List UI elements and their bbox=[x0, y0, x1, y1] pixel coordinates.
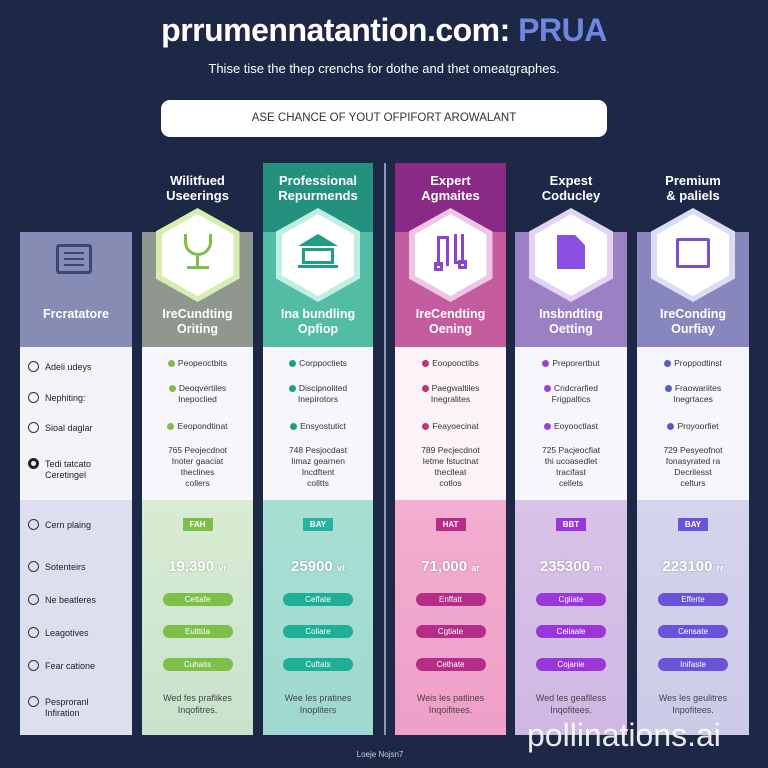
panel: column 3: Ietme Istuctnat bbox=[423, 456, 478, 466]
panel: column 3: theclleat bbox=[435, 467, 466, 477]
panel: feature labels: Sotenteirs bbox=[45, 562, 86, 572]
heading bbox=[665, 173, 721, 203]
heading: Useerings bbox=[166, 188, 229, 203]
panel: column 1: Inepoclied bbox=[178, 394, 217, 404]
icon: trophy hexagon bbox=[156, 208, 240, 302]
panel: column 2: Coliare bbox=[305, 627, 331, 636]
heading: Agmaites bbox=[421, 188, 480, 203]
panel: feature labels: Pesproranl bbox=[45, 697, 89, 707]
panel: feature labels: Adeli udeys bbox=[45, 362, 92, 372]
panel: column 3: Feayoecinat bbox=[432, 421, 479, 431]
heading bbox=[166, 173, 229, 203]
panel: feature labels: Tedi tatcato bbox=[45, 459, 91, 469]
panel: column 3: Cethate bbox=[436, 660, 465, 669]
watermark: pollinations.ai bbox=[527, 717, 721, 753]
panel: column 3: Inqoifitees. bbox=[429, 705, 472, 715]
panel: column 2: Inopliters bbox=[300, 705, 336, 715]
panel: column 5: Inegrtaces bbox=[673, 394, 713, 404]
panel: column 5: Fraowariites bbox=[675, 383, 721, 393]
search bar: ASE CHANCE OF YOUT OFPIFORT AROWALANT bbox=[252, 112, 516, 124]
panel: column 4: 725 Pacjeocfiat bbox=[542, 445, 600, 455]
icon: frame hexagon bbox=[651, 208, 735, 302]
panel: column 2: BAY bbox=[310, 520, 326, 529]
panel: column 2 bbox=[263, 163, 373, 735]
panel: column 4: 235300 m bbox=[540, 558, 602, 575]
panel: column 3: Paegwaltiles bbox=[432, 383, 479, 393]
panel: column 2: Inepirotors bbox=[298, 394, 338, 404]
search bar bbox=[161, 100, 607, 137]
icon: building hexagon bbox=[276, 208, 360, 302]
panel: column 2: colltts bbox=[307, 478, 329, 488]
panel: column 2: Ensyostutict bbox=[300, 421, 346, 431]
panel: feature labels: Nephiting: bbox=[45, 393, 86, 403]
panel: feature labels bbox=[20, 232, 132, 735]
title: prrumennatantion.com: PRUA bbox=[161, 12, 607, 48]
panel: column 4: Frigpaltics bbox=[552, 394, 590, 404]
panel: feature labels: Leagotives bbox=[45, 628, 89, 638]
footer note: Loeje Nojsn7 bbox=[357, 750, 403, 759]
panel: column 2: 25900 vt bbox=[291, 558, 345, 575]
panel: column 5: Censate bbox=[678, 627, 708, 636]
panel: column 3: IreCendting bbox=[416, 307, 485, 321]
panel: column 5: Efferte bbox=[681, 595, 705, 604]
panel: column 1: 19,390 vr bbox=[168, 558, 227, 575]
panel: column 3: Weis les patlines bbox=[417, 693, 484, 703]
panel: column 1: Inoter gaaciat bbox=[172, 456, 223, 466]
panel: column 3: 789 Pecjecdnot bbox=[421, 445, 480, 455]
heading bbox=[278, 173, 358, 203]
panel: column 2: Ina bundling bbox=[281, 307, 355, 321]
panel: column 4: Eoyooctlast bbox=[554, 421, 598, 431]
panel: column 5: BAY bbox=[685, 520, 701, 529]
panel: column 1: collers bbox=[185, 478, 210, 488]
panel: column 1: 765 Peojecdnot bbox=[168, 445, 227, 455]
panel: column 1: Deoqvertiles bbox=[179, 383, 226, 393]
panel: column 5: Decrilesst bbox=[674, 467, 712, 477]
panel: column 1: Cuhatis bbox=[184, 660, 211, 669]
panel: column 4: Wed les geaflless bbox=[536, 693, 606, 703]
panel: column 5: IreConding bbox=[660, 307, 726, 321]
icon: circuit hexagon bbox=[408, 208, 492, 302]
panel: column 1: Inqofitres. bbox=[178, 705, 217, 715]
panel: column 1 bbox=[142, 173, 253, 735]
panel: feature labels: Ceretingel bbox=[45, 470, 86, 480]
panel: column 5: 729 Pesyeofnot bbox=[663, 445, 723, 455]
heading: & paliels bbox=[666, 188, 720, 203]
panel: column 4: tracifast bbox=[556, 467, 586, 477]
panel: column 3: Inegralites bbox=[431, 394, 470, 404]
heading: Coducley bbox=[542, 188, 600, 203]
panel: column 4: Cojanie bbox=[557, 660, 585, 669]
heading: Professional bbox=[279, 173, 357, 188]
panel: column 5: Inpofitees. bbox=[672, 705, 714, 715]
panel: column 1: Peopeoctbits bbox=[178, 358, 227, 368]
panel: column 4: Cndcrarfied bbox=[554, 383, 598, 393]
panel: column 3: Oening bbox=[429, 322, 472, 336]
panel: column 2: Corppoctiets bbox=[299, 358, 347, 368]
heading: Premium bbox=[665, 173, 721, 188]
heading bbox=[421, 173, 480, 203]
panel: column 3: Eoopooctibs bbox=[432, 358, 479, 368]
panel: feature labels: Fear catione bbox=[45, 661, 95, 671]
heading: Expest bbox=[550, 173, 592, 188]
icon: document bbox=[56, 244, 92, 274]
panel: column 1: Wed fes praflikes bbox=[163, 693, 232, 703]
panel: feature labels: Cern plaing bbox=[45, 520, 91, 530]
panel: column 5: Proppodtinst bbox=[674, 358, 722, 368]
panel: column 4: Cgiiate bbox=[559, 595, 583, 604]
panel: column 3: cotlos bbox=[439, 478, 462, 488]
panel: column 5: Ourfiay bbox=[671, 322, 715, 336]
heading bbox=[542, 173, 600, 203]
panel: column 1: Eeopondtinat bbox=[177, 421, 228, 431]
panel: column 1: IreCundting bbox=[162, 307, 233, 321]
panel: column 5: Inifaste bbox=[680, 660, 706, 669]
panel: column 5: Wes les geulitres bbox=[659, 693, 727, 703]
heading: Repurmends bbox=[278, 188, 358, 203]
subtitle: Thise tise the thep crenchs for dothe and thet omeatgraphes. bbox=[208, 61, 560, 76]
panel: column 4: BBT bbox=[563, 520, 579, 529]
panel: column 4: Oetting bbox=[549, 322, 593, 336]
panel: column 4: Inqofitees. bbox=[550, 705, 592, 715]
panel: column 2: 748 Pesjocdast bbox=[289, 445, 347, 455]
panel: column 3: Cgtiate bbox=[438, 627, 463, 636]
panel: column 1: FAH bbox=[190, 520, 206, 529]
panel: feature labels: Ne beatleres bbox=[45, 595, 96, 605]
panel: column 3: 71,000 ar bbox=[421, 558, 480, 575]
panel: column 5: Proyoorfiet bbox=[677, 421, 719, 431]
panel: column 1: theclines bbox=[181, 467, 214, 477]
panel: column 2: Wee les pratines bbox=[285, 693, 351, 703]
panel: column 2: Opfiop bbox=[298, 322, 338, 336]
panel: column 4: Preporertbut bbox=[552, 358, 600, 368]
panel: feature labels: Sioal daglar bbox=[45, 423, 93, 433]
panel: column 4: cellets bbox=[559, 478, 583, 488]
panel: column 2: Iimaz gearnen bbox=[291, 456, 345, 466]
panel: column 3 bbox=[395, 163, 506, 735]
panel: feature labels: Frcratatore bbox=[43, 307, 109, 321]
panel: column 2: Ceffate bbox=[305, 595, 331, 604]
panel: column 4 bbox=[515, 173, 627, 735]
panel: column 1: Eulttda bbox=[185, 627, 210, 636]
panel: column 5: fonasyrated ra bbox=[666, 456, 720, 466]
panel: column 2: Incdftent bbox=[302, 467, 334, 477]
panel: column 1: Cettafe bbox=[185, 595, 210, 604]
heading: Expert bbox=[430, 173, 471, 188]
panel: column 2: Cuftats bbox=[305, 660, 331, 669]
panel: column 2: Discipnolited bbox=[299, 383, 347, 393]
panel: column 3: HAT bbox=[443, 520, 458, 529]
panel: column 5: celturs bbox=[680, 478, 706, 488]
icon: page hexagon bbox=[529, 208, 613, 302]
heading: Wilitfued bbox=[170, 173, 225, 188]
panel: column 5: 223100 rr bbox=[662, 558, 724, 575]
panel: feature labels: Infiration bbox=[45, 708, 80, 718]
panel: column 4: Celiaale bbox=[557, 627, 585, 636]
panel: column 5 bbox=[637, 173, 749, 735]
column divider bbox=[384, 163, 386, 735]
panel: column 4: Insbndting bbox=[539, 307, 603, 321]
panel: column 4: thi ucoasedlet bbox=[545, 456, 597, 466]
panel: column 3: Enffatt bbox=[439, 595, 462, 604]
panel: column 1: Oriting bbox=[177, 322, 218, 336]
